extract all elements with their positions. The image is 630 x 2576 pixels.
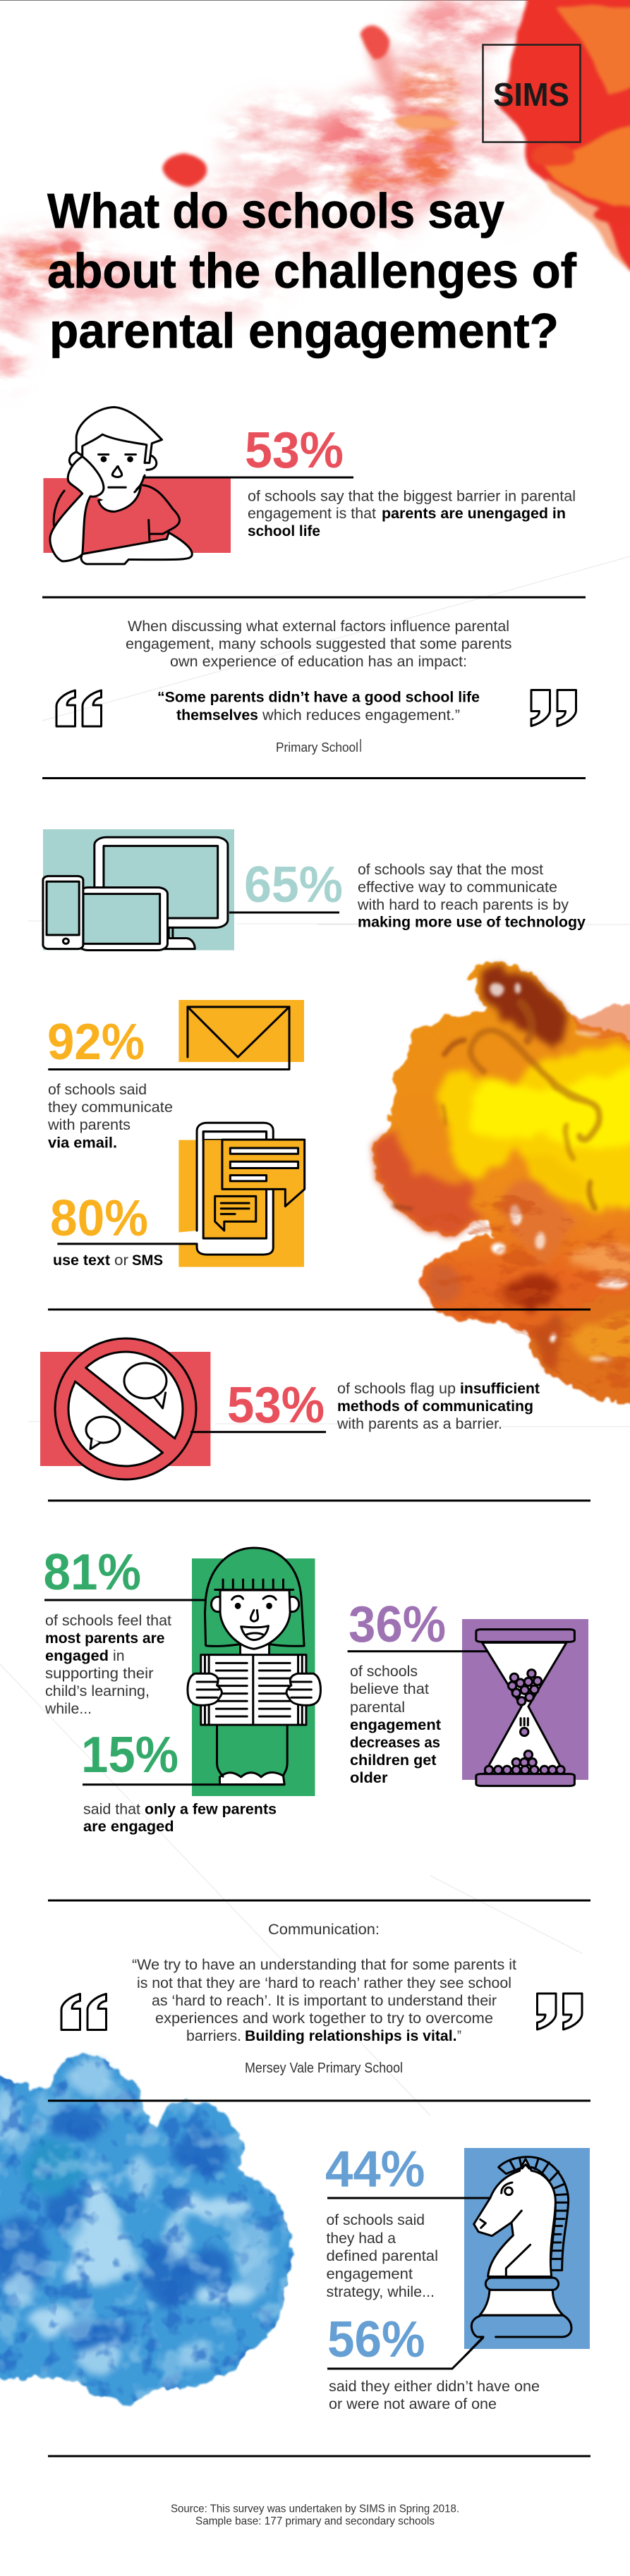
44% stat: 44%	[325, 2142, 425, 2198]
description: they communicate	[48, 1099, 173, 1116]
description: SMS	[132, 1252, 163, 1269]
quote text: is not that they are ‘hard to reach’ rather they see school	[137, 1975, 511, 1991]
quote text: Building relationships is vital.	[245, 2028, 457, 2044]
leader line	[83, 1783, 284, 1786]
description: methods of communicating	[337, 1398, 533, 1415]
description 15%: said that	[83, 1802, 140, 1818]
icon: chess knight on blue square	[464, 2148, 590, 2355]
title	[47, 183, 577, 358]
quote text: which reduces engagement.”	[262, 707, 460, 724]
description: believe that	[350, 1681, 429, 1697]
description 81%: in	[113, 1648, 124, 1664]
description: of schools say that the biggest barrier in parental	[248, 488, 576, 505]
description 44%: strategy, while...	[326, 2284, 435, 2300]
leader line	[327, 2197, 490, 2199]
description: with hard to reach parents is by	[357, 897, 569, 913]
description: use text	[53, 1252, 110, 1269]
description: with parents	[47, 1117, 131, 1133]
intro text: engagement, many schools suggested that some parents	[126, 636, 512, 652]
description: older	[350, 1770, 388, 1786]
intro text: own experience of education has an impact:	[170, 654, 467, 670]
36% stat: 36%	[349, 1597, 446, 1653]
56% stat: 56%	[327, 2312, 425, 2368]
icon: opening quote mark	[61, 1994, 106, 2029]
leader line	[327, 2368, 453, 2369]
source note	[171, 2503, 459, 2527]
icon: monitor, tablet and phone	[43, 829, 234, 951]
icon: envelope on yellow square	[49, 1000, 304, 1069]
81% stat: 81%	[44, 1544, 141, 1601]
80% stat: 80%	[50, 1190, 148, 1247]
description	[53, 1252, 163, 1269]
quote text: ”	[457, 2028, 461, 2044]
panel: 53% parents unengaged	[44, 407, 576, 564]
description	[337, 1381, 540, 1432]
description: of schools flag up	[337, 1381, 456, 1397]
title: What do schools say	[47, 183, 504, 238]
panel: 44% and 56% strategy	[325, 2142, 590, 2412]
title: about the challenges of	[47, 243, 577, 298]
leader line	[229, 911, 339, 914]
panel: 80% text or SMS	[50, 1123, 305, 1269]
description: with parents as a barrier.	[337, 1416, 502, 1432]
panel: 36% decreases with age	[348, 1597, 588, 1786]
53% stat: 53%	[245, 422, 344, 479]
icon: closing quote mark	[531, 690, 576, 726]
icon: no-chat sign on red square	[40, 1338, 210, 1479]
description: engagement	[350, 1717, 441, 1733]
description: effective way to communicate	[358, 879, 557, 896]
description	[47, 1082, 173, 1151]
icon: girl reading book on green square	[188, 1548, 320, 1796]
description 44%	[326, 2212, 438, 2300]
quote text: barriers.	[186, 2028, 241, 2044]
description	[357, 862, 586, 931]
description 56%	[329, 2379, 540, 2412]
intro text	[126, 618, 512, 670]
quote text: “We try to have an understanding that for some parents it	[132, 1957, 516, 1973]
intro text: When discussing what external factors influence parental	[128, 618, 509, 635]
description 56%: said they either didn’t have one	[329, 2379, 540, 2395]
attribution: Primary School	[276, 740, 358, 755]
source note: Sample base: 177 primary and secondary schools	[195, 2515, 435, 2527]
description 44%: they had a	[326, 2230, 396, 2247]
description 81%: most parents are	[45, 1630, 164, 1647]
description 81%: child’s learning,	[45, 1683, 150, 1699]
red ink smoke	[0, 0, 630, 388]
description 44%: defined parental	[326, 2248, 438, 2264]
description: parental	[350, 1699, 405, 1716]
92% stat: 92%	[47, 1014, 145, 1070]
leader line	[348, 1650, 488, 1652]
orange ink smoke	[373, 962, 630, 1403]
panel: first quote	[56, 618, 576, 755]
panel: 92% email	[47, 1000, 304, 1151]
description: of schools	[350, 1664, 418, 1680]
description: insufficient	[460, 1381, 540, 1397]
description: of schools say that the most	[358, 862, 543, 878]
quote text: “Some parents didn’t have a good school life	[157, 690, 480, 705]
description: decreases as	[350, 1735, 440, 1751]
description 81%: supporting their	[45, 1666, 154, 1682]
description 15%: only a few parents	[145, 1802, 277, 1818]
quote text: as ‘hard to reach’. It is important to understand their	[152, 1993, 497, 2009]
quote text: experiences and work together to try to overcome	[155, 2010, 493, 2027]
description: parents are unengaged in	[382, 506, 566, 522]
description 81%: of schools feel that	[45, 1613, 171, 1629]
icon: hourglass on purple square	[462, 1619, 588, 1786]
quote text	[157, 690, 480, 724]
panel: 53% insufficient communication	[40, 1338, 540, 1479]
leader line	[190, 1431, 326, 1433]
description 15%	[83, 1802, 277, 1835]
description 56%: or were not aware of one	[329, 2396, 497, 2412]
blue ink smoke	[0, 2054, 291, 2402]
panel: communication quote	[61, 1922, 582, 2076]
icon: phone with chat bubbles	[59, 1123, 305, 1267]
description: making more use of technology	[358, 914, 586, 931]
53% stat: 53%	[227, 1377, 325, 1434]
icon: bored man on red square	[44, 407, 231, 564]
icon: opening quote mark	[56, 690, 102, 726]
panel: 65% technology	[43, 829, 586, 951]
icon: closing quote mark	[538, 1994, 582, 2029]
quote text: themselves	[176, 707, 258, 724]
attribution: Mersey Vale Primary School	[245, 2061, 403, 2076]
description: children get	[350, 1752, 436, 1769]
description: engagement is that	[248, 506, 376, 522]
description 44%: engagement	[326, 2266, 413, 2283]
heading: Communication:	[268, 1922, 380, 1938]
description	[350, 1664, 441, 1786]
description 81%: while...	[44, 1701, 92, 1717]
description	[248, 488, 576, 539]
description 81%: engaged	[45, 1648, 109, 1664]
description: school life	[248, 523, 320, 539]
65% stat: 65%	[244, 857, 343, 913]
description 15%: are engaged	[83, 1819, 174, 1835]
faint background lines	[0, 556, 630, 2116]
description 81%	[44, 1613, 171, 1717]
description: of schools said	[48, 1082, 147, 1098]
title: parental engagement?	[49, 303, 559, 358]
15% stat: 15%	[81, 1727, 178, 1783]
description: or	[114, 1252, 128, 1269]
description 44%: of schools said	[326, 2212, 425, 2228]
description: via email.	[48, 1135, 117, 1151]
leader line	[143, 477, 353, 478]
SIMS logo: SIMS	[493, 76, 569, 113]
quote text	[132, 1957, 516, 2044]
panel: 81% and 15% engagement	[44, 1544, 320, 1835]
source note: Source: This survey was undertaken by SIMS in Spring 2018.	[171, 2503, 459, 2515]
SIMS logo	[483, 45, 580, 142]
leader line	[44, 1599, 205, 1601]
